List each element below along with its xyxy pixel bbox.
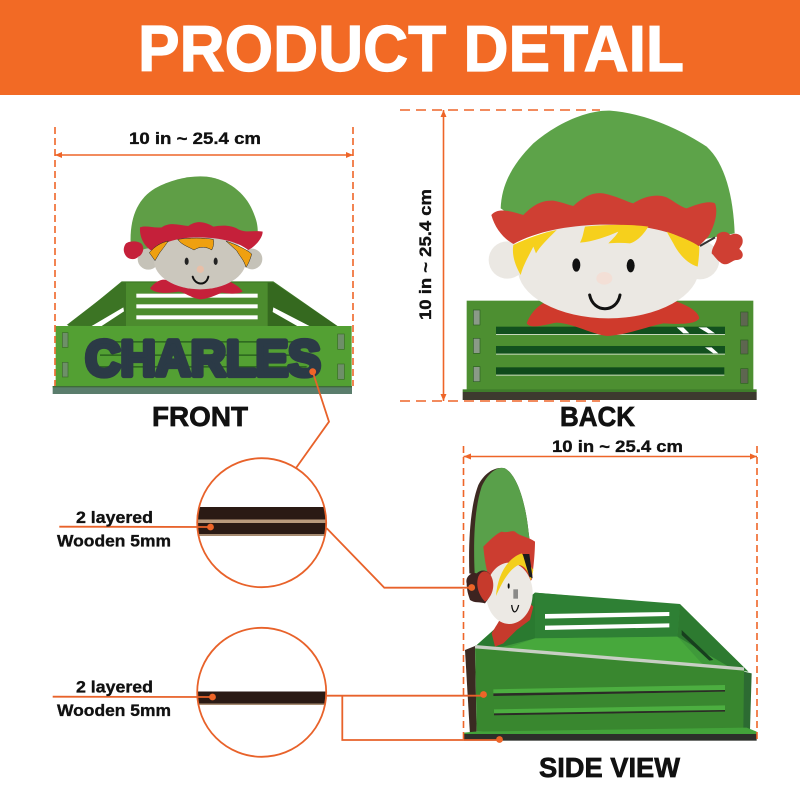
- dimension: back height: [400, 110, 600, 401]
- label: side width: 10 in ~ 25.4 cm: [552, 437, 683, 456]
- crate back wall: [67, 281, 338, 327]
- panel: side view product photo: [464, 468, 757, 741]
- label: upper material: [57, 509, 171, 550]
- name text CHARLES: CHARLES: [85, 331, 321, 387]
- heading: back: BACK: [560, 401, 635, 432]
- label: upper material: 2 layered: [76, 509, 153, 527]
- leader lines: [53, 372, 499, 740]
- label: lower material: [57, 678, 171, 720]
- label: lower material: Wooden 5mm: [57, 702, 171, 720]
- heading: front: FRONT: [152, 401, 248, 432]
- panel: back view product photo: [463, 111, 757, 400]
- elf head front: [124, 176, 263, 299]
- label: front width: 10 in ~ 25.4 cm: [129, 129, 261, 148]
- heading: side view: SIDE VIEW: [539, 752, 681, 783]
- dimension: front width: [55, 127, 353, 386]
- crate front panel: [53, 326, 352, 394]
- leader dots: [207, 368, 503, 743]
- tray interior: [475, 593, 748, 672]
- elf head back: [489, 111, 743, 336]
- callout: upper wood thickness circle: [190, 458, 330, 587]
- crate: [463, 301, 757, 400]
- label: upper material: Wooden 5mm: [57, 532, 171, 550]
- label: lower material: 2 layered: [76, 678, 153, 696]
- title: PRODUCT DETAIL: [138, 12, 684, 85]
- panel: front view product photo: [53, 176, 352, 394]
- dimension: side width: [464, 437, 757, 742]
- callout: lower wood thickness circle: [190, 628, 330, 757]
- elf cut-out side: [466, 468, 535, 647]
- tray front wall: [464, 645, 757, 741]
- header banner: [0, 0, 800, 95]
- label: back height: 10 in ~ 25.4 cm: [416, 189, 435, 320]
